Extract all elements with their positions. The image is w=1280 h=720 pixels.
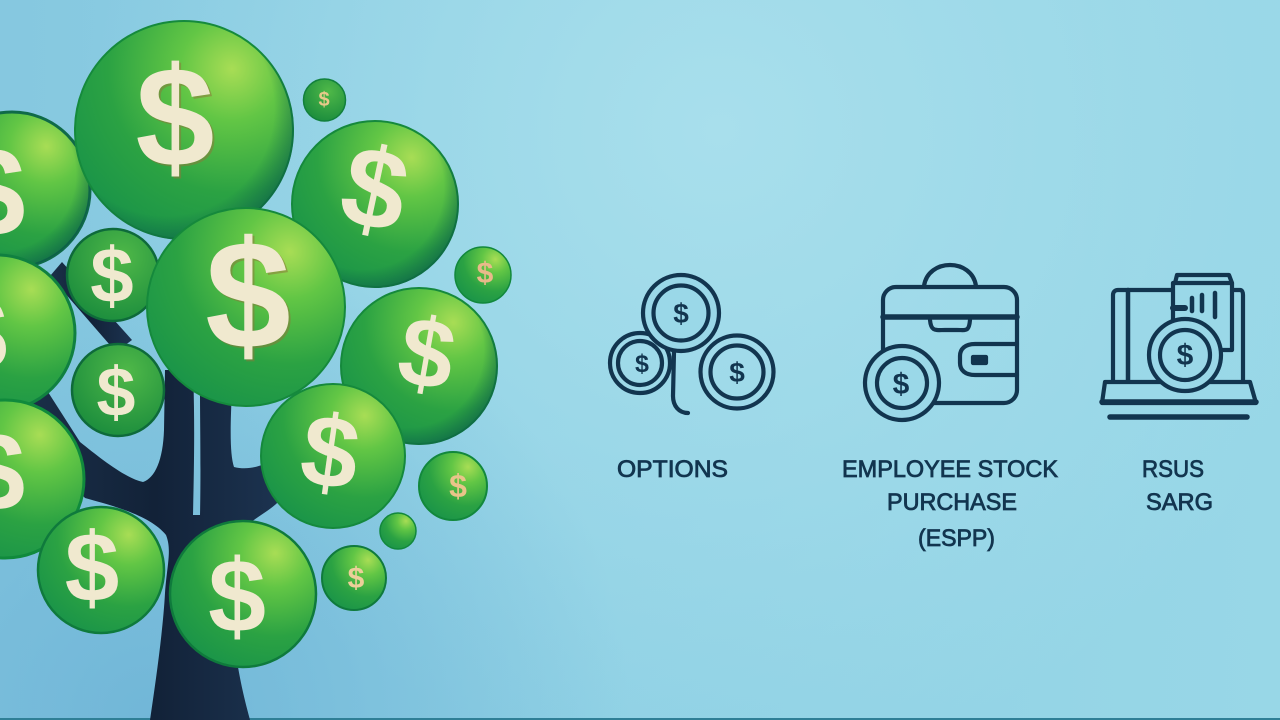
coin: bottom center: $ xyxy=(208,539,266,655)
coin: bottom small xyxy=(322,546,386,610)
icon: options coins xyxy=(610,275,774,413)
coin: right small: $ xyxy=(477,257,494,290)
money tree foliage xyxy=(0,20,511,667)
coin: center largest: $ xyxy=(205,209,291,381)
coin: inner upper small: $ xyxy=(90,231,134,319)
coin: inner lower small xyxy=(72,344,164,436)
label: employee stock purchase: PURCHASE xyxy=(887,489,1017,516)
label: rsus and sars xyxy=(1142,456,1213,516)
coin: bottom center xyxy=(170,521,316,667)
coin: lower left xyxy=(0,400,84,558)
label: rsus and sars: RSUS xyxy=(1142,456,1204,483)
coin: bottom small: $ xyxy=(348,562,365,595)
coin: inner lower small: $ xyxy=(97,353,135,431)
coin: center largest: $ xyxy=(207,211,293,383)
icon: options coins: $ xyxy=(635,350,649,378)
coin: center largest xyxy=(147,208,345,406)
coin: right middle xyxy=(340,287,498,445)
coin: right middle: $ xyxy=(390,294,463,412)
money tree trunk and branches xyxy=(30,262,280,720)
coin: top large: $ xyxy=(138,40,216,199)
icon: laptop with document and coin: $ xyxy=(1177,339,1194,372)
coin: top small: $ xyxy=(318,89,330,111)
coin: lower right: $ xyxy=(294,392,366,512)
icon: options coins: $ xyxy=(673,298,689,329)
label: options: OPTIONS xyxy=(617,456,728,483)
icon: wallet with coin xyxy=(865,265,1017,420)
icon: laptop with document and coin xyxy=(1102,275,1256,417)
coin: bottom left: $ xyxy=(65,512,119,622)
icon: wallet with coin: $ xyxy=(893,368,910,401)
coin: upper right: $ xyxy=(330,121,419,258)
coin: top large: $ xyxy=(136,38,214,197)
coin: lower right xyxy=(261,384,405,528)
label: employee stock purchase: EMPLOYEE STOCK xyxy=(842,456,1058,483)
label: employee stock purchase xyxy=(842,456,1058,552)
coin: left middle xyxy=(0,255,75,411)
coin: upper right xyxy=(291,120,459,288)
coin: top small xyxy=(304,79,346,121)
coin: right small lower xyxy=(419,452,487,520)
coin: bottom left xyxy=(38,507,164,633)
coin: inner upper small xyxy=(67,229,159,321)
coin: right small xyxy=(455,247,511,303)
coin: top large xyxy=(74,20,294,240)
label: rsus and sars: SARG xyxy=(1146,489,1213,516)
icon: options coins: $ xyxy=(729,357,745,388)
coin: upper left xyxy=(0,112,90,268)
coin: dot xyxy=(380,513,416,549)
coin: right small lower: $ xyxy=(449,468,467,504)
label: employee stock purchase: (ESPP) xyxy=(918,525,995,552)
